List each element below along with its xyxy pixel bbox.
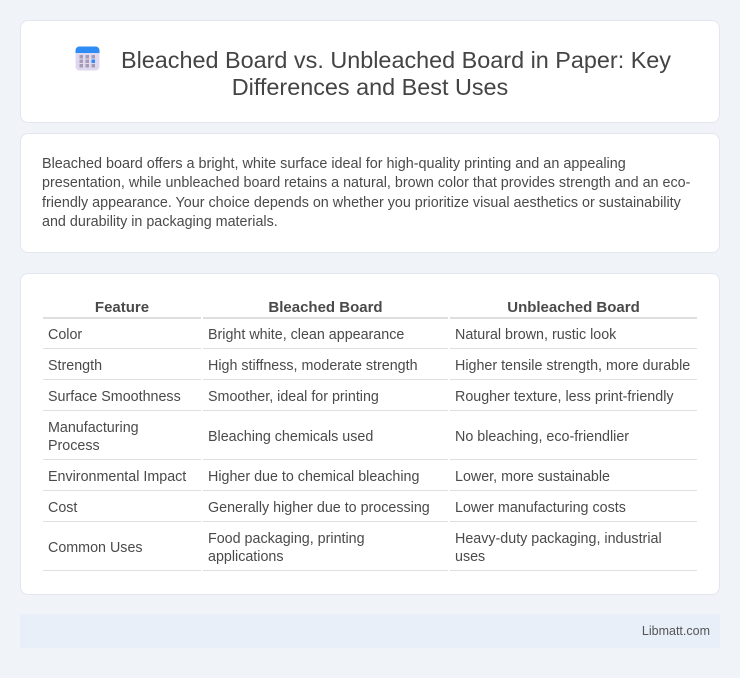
- row: manufacturing process: Manufacturing: [48, 420, 139, 436]
- panel: comparison table: [20, 273, 720, 595]
- title: [121, 47, 671, 100]
- text block: summary: friendly appearance. Your choice depends on whether you prioritize visual aesthetics or sustainability: [42, 195, 681, 211]
- text block: summary: presentation, while unbleached board retains a natural, brown color that provides strength and an eco-: [42, 175, 690, 191]
- row: strength: Strength: [48, 358, 102, 374]
- table header: Bleached Board: [268, 299, 383, 316]
- row: manufacturing process: Process: [48, 438, 100, 454]
- title: Differences and Best Uses: [232, 74, 508, 100]
- footer bar: [20, 614, 720, 648]
- row: cost: Cost: [48, 500, 77, 516]
- row: manufacturing process: No bleaching, eco-friendlier: [455, 429, 629, 445]
- row: common uses: Heavy-duty packaging, industrial: [455, 531, 662, 547]
- row: environmental impact: [43, 469, 697, 491]
- row: environmental impact: Environmental Impact: [48, 469, 186, 485]
- row: color: Color: [48, 327, 82, 343]
- row: surface smoothness: Smoother, ideal for printing: [208, 389, 379, 405]
- row: strength: Higher tensile strength, more durable: [455, 358, 690, 374]
- text block: summary: and durability in packaging materials.: [42, 214, 278, 230]
- row: manufacturing process: [43, 420, 697, 460]
- row: common uses: uses: [455, 549, 485, 565]
- row: common uses: Food packaging, printing: [208, 531, 365, 547]
- row: surface smoothness: [43, 389, 697, 411]
- row: common uses: [43, 531, 697, 571]
- row: color: [43, 327, 697, 349]
- panel: summary text: [20, 133, 720, 253]
- row: common uses: applications: [208, 549, 284, 565]
- row: surface smoothness: Rougher texture, less print-friendly: [455, 389, 674, 405]
- row: common uses: Common Uses: [48, 540, 143, 556]
- row: environmental impact: Higher due to chemical bleaching: [208, 469, 419, 485]
- table header: Feature: [95, 299, 149, 316]
- footer text: Libmatt.com: Libmatt.com: [642, 624, 710, 638]
- table header: [43, 299, 697, 319]
- row: surface smoothness: Surface Smoothness: [48, 389, 181, 405]
- panel: title card: [20, 20, 720, 123]
- row: color: Natural brown, rustic look: [455, 327, 616, 343]
- row: cost: Generally higher due to processing: [208, 500, 430, 516]
- table header: Unbleached Board: [507, 299, 640, 316]
- row: environmental impact: Lower, more sustainable: [455, 469, 610, 485]
- title: Bleached Board vs. Unbleached Board in Paper: Key: [121, 47, 671, 73]
- row: cost: Lower manufacturing costs: [455, 500, 626, 516]
- row: color: Bright white, clean appearance: [208, 327, 404, 343]
- row: manufacturing process: Bleaching chemicals used: [208, 429, 373, 445]
- row: strength: High stiffness, moderate strength: [208, 358, 418, 374]
- row: strength: [43, 358, 697, 380]
- row: cost: [43, 500, 697, 522]
- text block: summary: [42, 156, 690, 230]
- icon: calendar: [76, 46, 100, 70]
- text block: summary: Bleached board offers a bright, white surface ideal for high-quality printing and an appealing: [42, 156, 626, 172]
